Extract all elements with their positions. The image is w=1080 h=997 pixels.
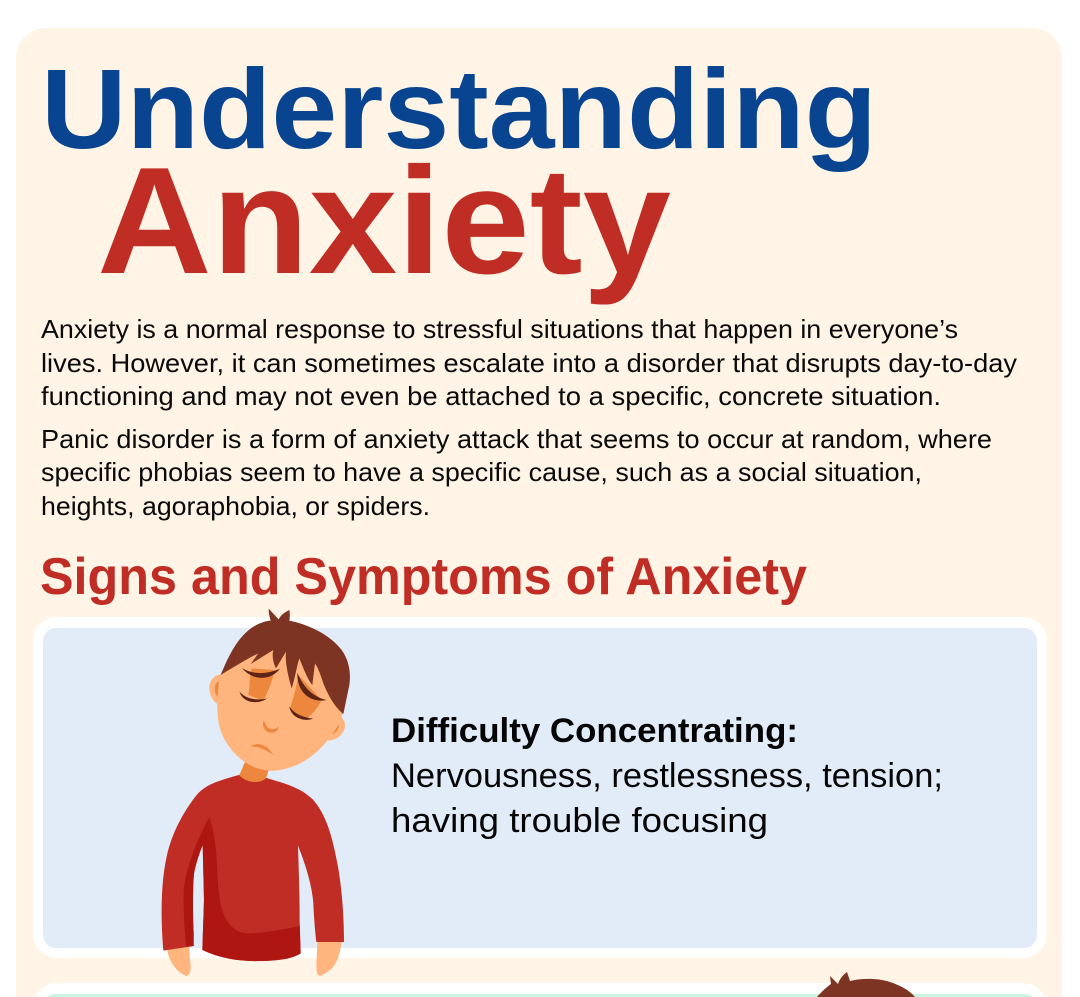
card border: [33, 983, 1047, 997]
eyebrow right: [297, 673, 327, 701]
sweater: [162, 775, 344, 961]
face: [217, 637, 343, 771]
left hand: [167, 943, 191, 976]
panel: next card, partly visible: [33, 983, 1047, 997]
paragraph: anxiety definition: lives. However, it can sometimes escalate into a disorder that disrupts day-to-day: [41, 348, 1017, 378]
title line: Understanding: Understanding: [41, 46, 877, 172]
left ear: [209, 674, 225, 705]
card fill: [43, 628, 1037, 948]
icon: tired boy character: [162, 609, 350, 976]
icon: next character hair: [817, 972, 915, 997]
symptom description: having trouble focusing: [391, 802, 768, 840]
nose: [263, 721, 278, 733]
sweater shadow: inner sleeve: [184, 817, 301, 961]
paragraph: panic disorder: Panic disorder is a form of anxiety attack that seems to occur at random, where: [41, 424, 992, 454]
card border: [33, 617, 1047, 958]
paragraph: panic disorder: [41, 424, 992, 521]
hair: [221, 609, 350, 714]
right ear: [325, 715, 345, 740]
paragraph: anxiety definition: [41, 314, 1017, 411]
eye shadow left: [248, 668, 275, 701]
eye left: [239, 691, 267, 702]
symptom description: [391, 757, 943, 840]
card text: [391, 712, 943, 840]
neck: [239, 762, 269, 782]
paragraph: anxiety definition: functioning and may not even be attached to a specific, concrete situation.: [41, 381, 941, 411]
eye right: [289, 707, 313, 720]
title: [41, 46, 877, 306]
paragraph: anxiety definition: Anxiety is a normal response to stressful situations that happen in everyone’s: [41, 314, 958, 344]
right hand: [316, 938, 342, 976]
card fill: [43, 994, 1037, 997]
panel: difficulty concentrating card: [33, 617, 1047, 958]
paragraph: panic disorder: specific phobias seem to have a specific cause, such as a social situation,: [41, 457, 922, 487]
heading: signs and symptoms: Signs and Symptoms of Anxiety: [40, 548, 807, 606]
eyebrow left: [242, 668, 280, 678]
title line: Anxiety: Anxiety: [97, 136, 671, 306]
eye shadow right: [290, 675, 322, 719]
text block: intro paragraphs: [41, 314, 1017, 521]
symptom name: Difficulty Concentrating:: [391, 712, 798, 750]
symptom description: Nervousness, restlessness, tension;: [391, 757, 943, 795]
mouth: [251, 744, 273, 755]
paragraph: panic disorder: heights, agoraphobia, or spiders.: [41, 491, 430, 521]
